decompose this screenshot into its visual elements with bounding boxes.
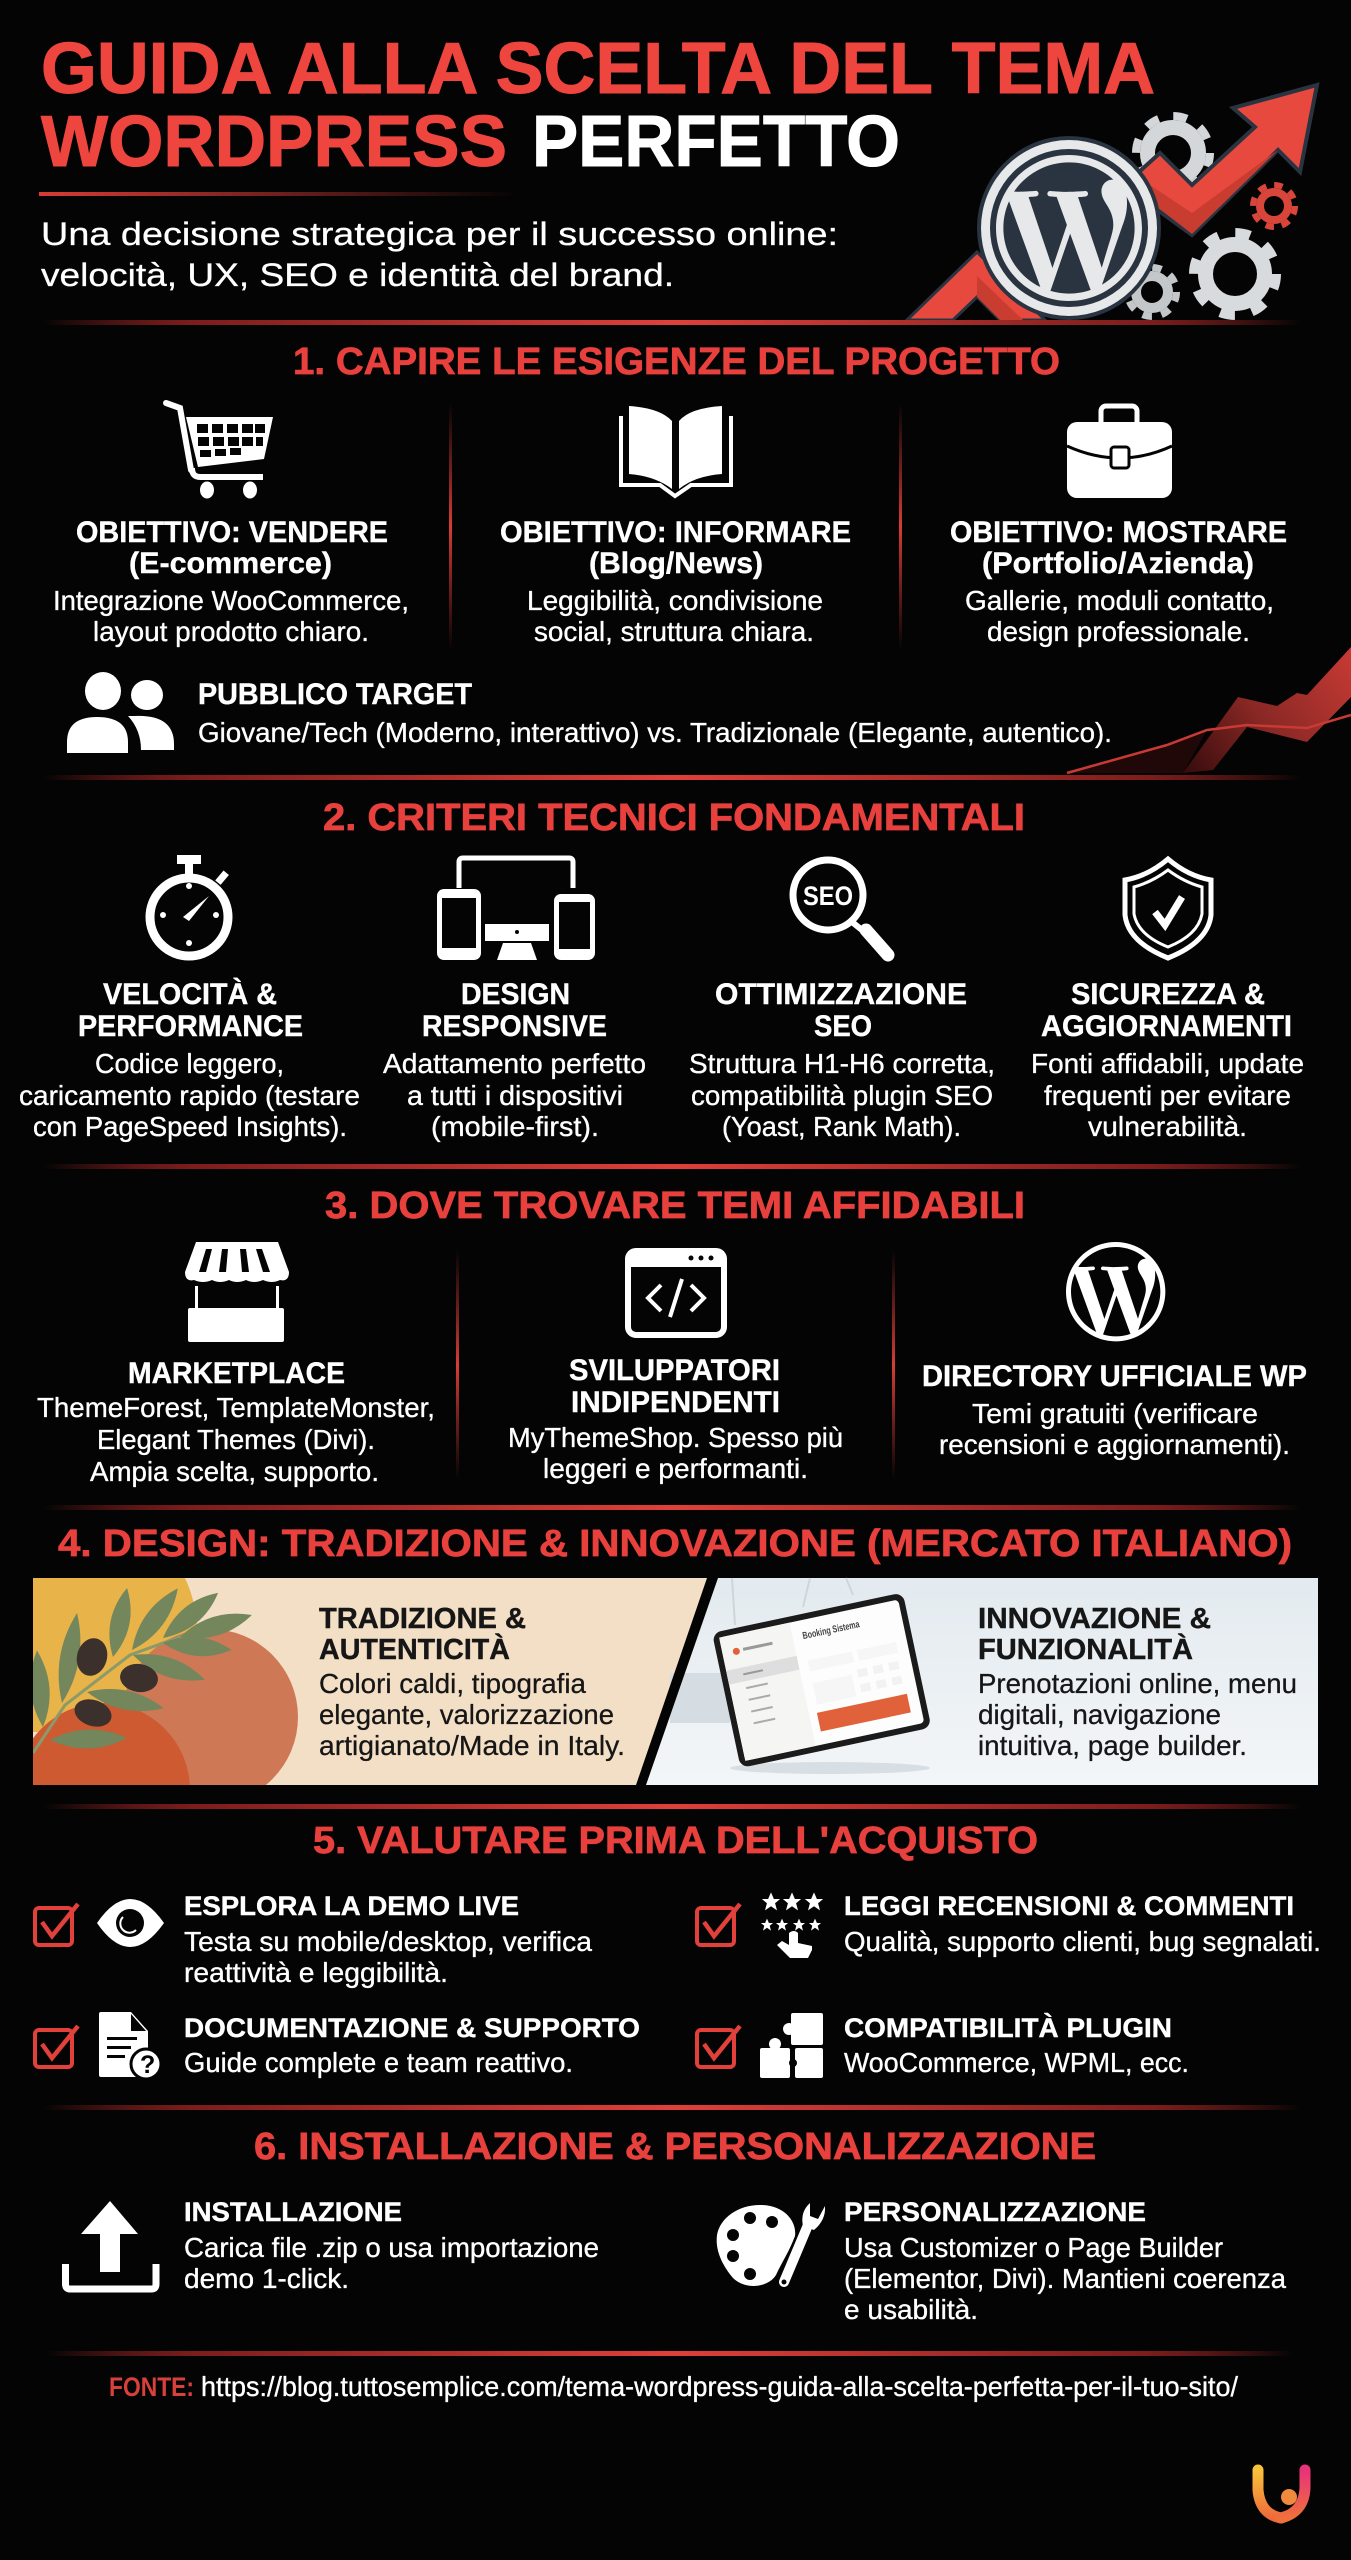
heading 3: 3. DOVE TROVARE TEMI AFFIDABILI [325,1185,1025,1227]
heading 6: 6. INSTALLAZIONE & PERSONALIZZAZIONE [254,2126,1096,2168]
text: mostrare: (Portfolio/Azienda) [982,547,1254,580]
text: innovazione: digitali, navigazione [978,1699,1221,1730]
text: demo live: Testa su mobile/desktop, verifica [184,1926,592,1957]
text: velocità: VELOCITÀ & [103,977,277,1011]
text: seo: compatibilità plugin SEO [691,1080,993,1111]
text: personalizzazione: PERSONALIZZAZIONE [844,2197,1146,2227]
text: mostrare: OBIETTIVO: MOSTRARE [950,516,1287,549]
text: velocità: con PageSpeed Insights). [33,1111,347,1142]
source line: https://blog.tuttosemplice.com/tema-wordpress-guida-alla-scelta-perfetta-per-il-tuo-sito/ [201,2371,1238,2402]
icon: document with question mark [99,2012,161,2079]
text: responsive: RESPONSIVE [422,1010,607,1043]
icon: red checkbox [697,1904,740,1945]
icon: stars and pointing hand [761,1892,823,1958]
text: seo [689,978,995,1142]
text: responsive: (mobile-first). [431,1111,599,1142]
text: plugin [844,2012,1189,2078]
subtitle [41,216,838,293]
text: mostrare [950,516,1287,647]
text: installazione: demo 1-click. [184,2263,349,2294]
text: innovazione [978,1603,1297,1761]
section 3: dove trovare temi [37,1185,1307,1487]
subtitle: velocità, UX, SEO e identità del brand. [41,257,674,293]
icon: open book [621,406,731,496]
title: PERFETTO [532,102,900,182]
text: personalizzazione: Usa Customizer o Page Builder [844,2232,1223,2263]
column: sviluppatori [508,1251,843,1484]
text: marketplace: Elegant Themes (Divi). [97,1424,375,1455]
icon: wordpress logo [1066,1242,1165,1341]
text: innovazione: intuitiva, page builder. [978,1730,1247,1761]
text: responsive [383,978,646,1142]
text: tradizione [319,1603,625,1761]
text: installazione: Carica file .zip o usa importazione [184,2232,599,2263]
icon: wordpress logo with growth arrow and gears [907,85,1317,320]
section 1: capire le esigenze [53,341,1351,773]
icon: document with question mark: ? [140,2051,155,2079]
text: pubblico target: Giovane/Tech (Moderno, interattivo) vs. Tradizionale (Elegante, autentico). [198,717,1112,748]
text: demo live [184,1891,592,1988]
text: recensioni [844,1891,1321,1957]
text: demo live: ESPLORA LA DEMO LIVE [184,1891,519,1921]
icon: seo magnifier [793,860,888,955]
text: seo: (Yoast, Rank Math). [722,1111,961,1142]
text: vendere: (E-commerce) [129,547,332,580]
title: GUIDA ALLA SCELTA DEL TEMA [41,29,1155,109]
illustration: tablet with booking screen: Booking Sistema [802,1619,861,1642]
text: informare [500,516,851,647]
text: documentazione [184,2013,640,2078]
text: documentazione: Guide complete e team reattivo. [184,2047,573,2078]
text: informare: OBIETTIVO: INFORMARE [500,516,851,549]
text: sicurezza [1031,978,1304,1142]
text: recensioni: Qualità, supporto clienti, bug segnalati. [844,1926,1321,1957]
text: pubblico target: PUBBLICO TARGET [198,678,472,711]
column: vendere [53,403,409,647]
text: tradizione: Colori caldi, tipografia [319,1668,586,1699]
text: marketplace [37,1357,435,1487]
text: responsive: Adattamento perfetto [383,1048,646,1079]
item: documentazione [35,2012,640,2079]
text: informare: Leggibilità, condivisione [527,585,823,616]
text: informare: (Blog/News) [589,547,763,580]
column: informare [500,406,851,647]
text: informare: social, struttura chiara. [534,616,814,647]
text: installazione [184,2197,599,2294]
text: vendere [53,516,409,647]
text: mostrare: design professionale. [987,616,1250,647]
text: personalizzazione: (Elementor, Divi). Mantieni coerenza [844,2263,1286,2294]
heading 1: 1. CAPIRE LE ESIGENZE DEL PROGETTO [293,341,1060,383]
section 6: installazione [66,2126,1286,2325]
text: pubblico target [198,678,1112,748]
decorative growth swoosh [1067,647,1351,773]
item: personalizzazione [717,2197,1286,2325]
text: seo: SEO [814,1010,872,1043]
illustration: tablet with booking screen [712,1592,931,1768]
column: marketplace [37,1242,435,1487]
text: marketplace: ThemeForest, TemplateMonster, [37,1392,435,1423]
text: sviluppatori: INDIPENDENTI [571,1386,780,1419]
icon: responsive devices [437,858,595,960]
text: sviluppatori: SVILUPPATORI [569,1354,780,1387]
text: installazione: INSTALLAZIONE [184,2197,402,2227]
text: marketplace: Ampia scelta, supporto. [90,1456,379,1487]
text: personalizzazione [844,2197,1286,2325]
subtitle: Una decisione strategica per il successo online: [41,216,838,252]
section 5: valutare [35,1820,1321,2079]
text: plugin: WooCommerce, WPML, ecc. [844,2047,1189,2078]
text: sicurezza: AGGIORNAMENTI [1041,1010,1292,1043]
text: vendere: Integrazione WooCommerce, [53,585,409,616]
icon: brand logo [1258,2470,1305,2518]
item: recensioni [697,1891,1321,1958]
text: tradizione: elegante, valorizzazione [319,1699,614,1730]
panel: tradizione [33,1578,707,1785]
text: vendere: OBIETTIVO: VENDERE [76,516,388,549]
column: responsive [383,858,646,1142]
text: directory [922,1360,1307,1460]
title: WORDPRESS [41,102,507,182]
text: velocità: Codice leggero, [95,1048,284,1079]
text: velocità [19,977,360,1142]
header [39,29,1317,320]
heading 5: 5. VALUTARE PRIMA DELL'ACQUISTO [313,1820,1038,1862]
text: mostrare: Gallerie, moduli contatto, [965,585,1274,616]
text: velocità: caricamento rapido (testare [19,1080,360,1111]
text: plugin: COMPATIBILITÀ PLUGIN [844,2012,1172,2043]
text: documentazione: DOCUMENTAZIONE & SUPPORTO [184,2013,640,2043]
column: directory ufficiale [922,1242,1307,1460]
icon: red checkbox [35,1904,78,1945]
text: innovazione: Prenotazioni online, menu [978,1668,1297,1699]
icon: puzzle pieces [760,2013,823,2078]
icon: shield with check [1125,859,1211,958]
column: sicurezza [1031,859,1304,1142]
text: sicurezza: frequenti per evitare [1044,1080,1291,1111]
text: sviluppatori [508,1354,843,1484]
text: sicurezza: SICUREZZA & [1071,978,1265,1011]
icon: code window [628,1251,724,1335]
illustration: olive branch on warm shapes [33,1578,707,1785]
text: vendere: layout prodotto chiaro. [93,616,369,647]
column: seo [689,860,995,1142]
icon: red checkbox [35,2026,78,2067]
heading 2: 2. CRITERI TECNICI FONDAMENTALI [323,797,1025,839]
title [41,29,1155,182]
icon: briefcase [1067,406,1172,498]
text: seo: Struttura H1-H6 corretta, [689,1048,995,1079]
icon: shopping cart [166,403,273,498]
panel: innovazione [636,1578,1318,1785]
text: marketplace: MARKETPLACE [128,1357,345,1390]
icon: eye [97,1899,164,1947]
text: innovazione: FUNZIONALITÀ [978,1632,1193,1666]
icon: seo magnifier: SEO [803,881,853,911]
text: demo live: reattività e leggibilità. [184,1957,448,1988]
text: innovazione: INNOVAZIONE & [978,1603,1211,1635]
text: tradizione: artigianato/Made in Italy. [319,1730,625,1761]
icon: market stall [185,1242,289,1342]
text: sicurezza: vulnerabilità. [1088,1111,1247,1142]
item: demo live [35,1891,592,1988]
text: recensioni: LEGGI RECENSIONI & COMMENTI [844,1891,1294,1921]
text: sicurezza: Fonti affidabili, update [1031,1048,1304,1079]
text: sviluppatori: leggeri e performanti. [543,1453,808,1484]
text: responsive: DESIGN [461,978,570,1011]
text: tradizione: AUTENTICITÀ [319,1632,510,1666]
icon: red checkbox [697,2026,740,2067]
text: sviluppatori: MyThemeShop. Spesso più [508,1422,843,1453]
column: velocità [19,855,360,1142]
item: plugin [697,2012,1189,2078]
icon: people [67,672,174,753]
column: mostrare [950,406,1287,647]
text: directory: DIRECTORY UFFICIALE WP [922,1360,1307,1393]
text: directory: recensioni e aggiornamenti). [939,1429,1290,1460]
text: seo: OTTIMIZZAZIONE [715,978,967,1011]
item: installazione [66,2197,599,2294]
text: velocità: PERFORMANCE [78,1010,303,1043]
section 4: design [33,1528,1318,1785]
source line: FONTE: [109,2372,194,2402]
text: tradizione: TRADIZIONE & [319,1603,526,1635]
heading 4: 4. DESIGN: TRADIZIONE & INNOVAZIONE (MERCATO ITALIANO) [58,1523,1292,1565]
icon: stopwatch [150,855,229,956]
text: responsive: a tutti i dispositivi [407,1080,623,1111]
text: directory: Temi gratuiti (verificare [972,1398,1258,1429]
icon: palette and wrench [717,2203,825,2286]
pubblico target [67,672,1112,753]
icon: upload [66,2201,156,2289]
text: personalizzazione: e usabilità. [844,2294,978,2325]
section 2: criteri tecnici [19,797,1304,1142]
